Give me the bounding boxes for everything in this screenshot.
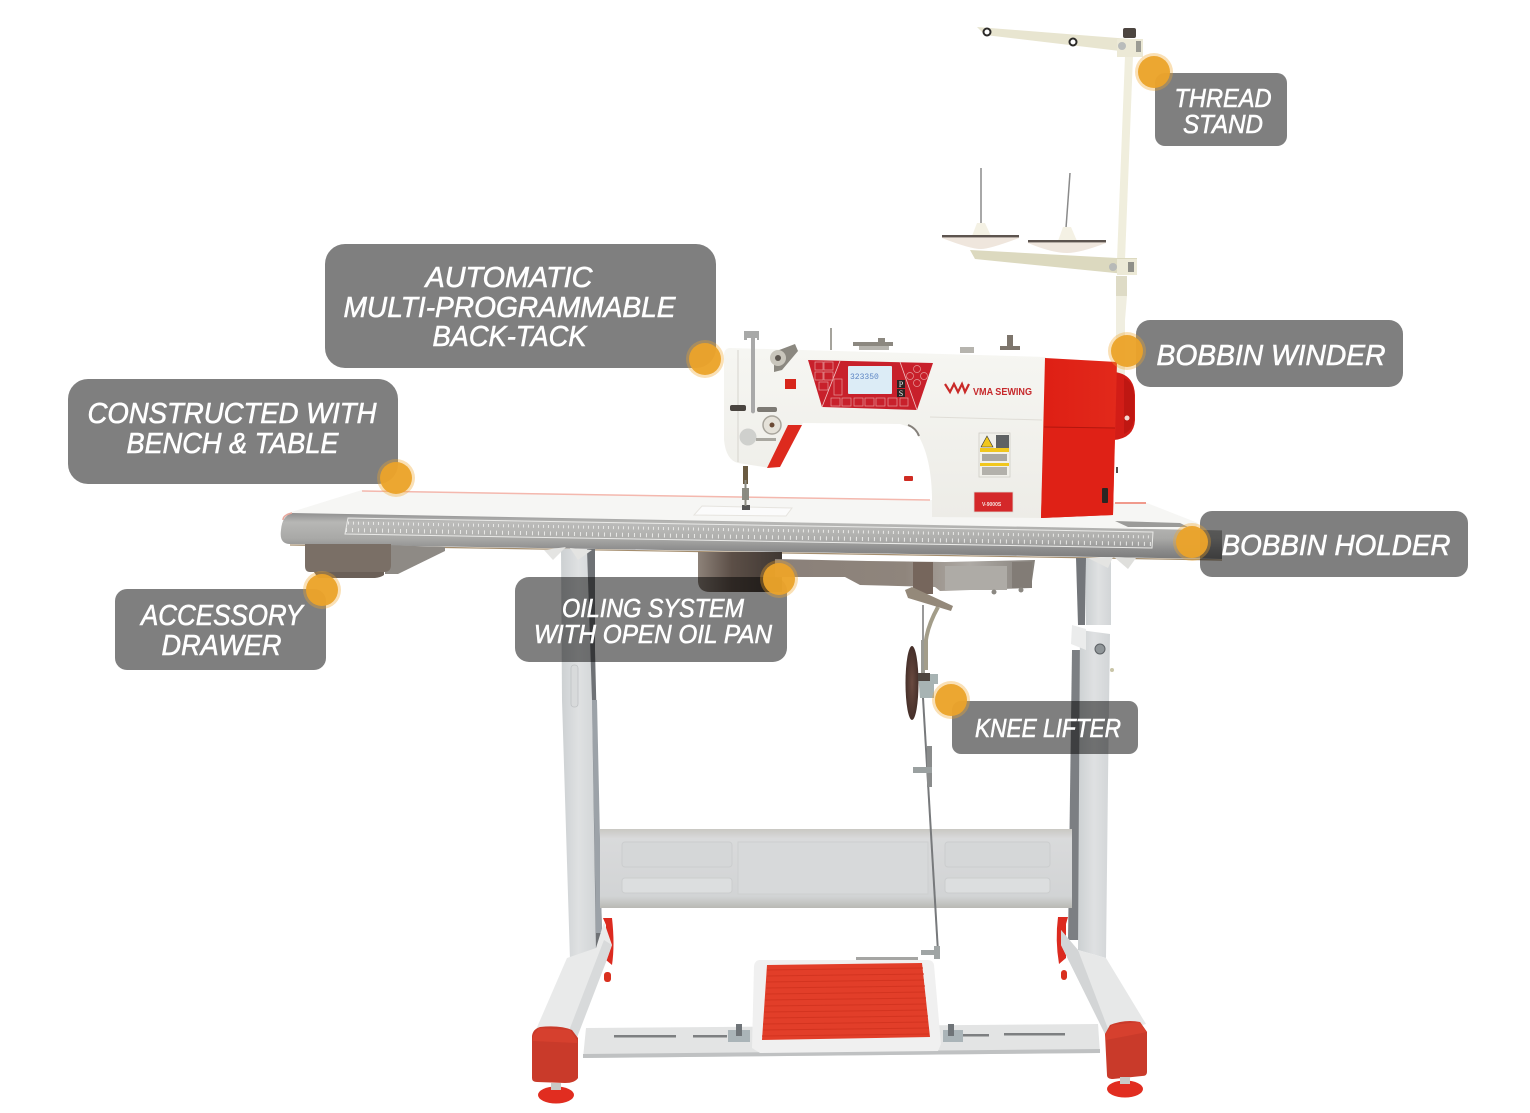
label: thread stand: THREAD: [1174, 83, 1272, 113]
knee pad: [906, 646, 918, 720]
top arm: [977, 27, 1143, 57]
label: oiling system: [515, 577, 787, 662]
machine logo: VMA SEWING: [973, 386, 1032, 398]
ruler: [345, 518, 1153, 548]
lower tube of thread stand: [1116, 276, 1127, 375]
base frame: [532, 917, 1147, 1104]
marker: oiling system: [760, 560, 798, 598]
needle bar: [751, 336, 755, 414]
left foot pad: [538, 1086, 574, 1104]
table surface: [285, 490, 1198, 532]
lever: [904, 476, 913, 481]
small red square: [785, 379, 796, 389]
label: automatic back-tack: BACK-TACK: [432, 321, 588, 353]
label: thread stand: [1155, 73, 1287, 146]
right tab: [1057, 917, 1068, 964]
label: oiling system: OILING SYSTEM: [562, 593, 744, 623]
pedal frame: [752, 960, 941, 1053]
machine head behind parts: [859, 344, 974, 353]
label: oiling system: WITH OPEN OIL PAN: [534, 619, 772, 649]
left tab: [603, 918, 614, 965]
marker: back-tack: [686, 340, 724, 378]
red motor housing: [1041, 358, 1135, 518]
label: bobbin winder: BOBBIN WINDER: [1156, 340, 1386, 372]
right foot bar: [1061, 930, 1146, 1036]
clamp: [918, 674, 938, 698]
label: accessory drawer: ACCESSORY: [139, 600, 305, 632]
machine body: [724, 348, 1046, 518]
marker: knee lifter: [932, 681, 970, 719]
needle assembly: [742, 466, 750, 510]
left foot bar: [535, 922, 612, 1040]
label: automatic back-tack: [325, 244, 716, 368]
oil pan: [698, 552, 1035, 594]
table underside line: [290, 545, 1222, 560]
left leg: [544, 547, 602, 960]
accessory drawer: [305, 544, 445, 578]
label: thread stand: STAND: [1183, 109, 1263, 139]
marker: accessory drawer: [303, 571, 341, 609]
crossbar: [600, 829, 1072, 908]
label: automatic back-tack: AUTOMATIC: [424, 262, 594, 294]
label: bench and table: CONSTRUCTED WITH: [88, 398, 377, 430]
thread spindles and discs: [942, 168, 1106, 253]
marker: bobbin winder: [1108, 332, 1146, 370]
warning label: [979, 433, 1010, 477]
upright post: [1117, 56, 1133, 260]
pedal: [728, 957, 963, 1053]
label: bobbin holder: [1200, 511, 1468, 577]
model plate: [974, 492, 1013, 512]
label: accessory drawer: [115, 589, 326, 670]
knee lifter: [905, 587, 953, 959]
control panel: 323350: [850, 373, 879, 382]
marker: bobbin holder: [1173, 523, 1211, 561]
control panel: S: [899, 389, 903, 398]
left cap: [532, 1026, 578, 1083]
head controls: [730, 405, 746, 411]
table front edge: [281, 513, 1222, 559]
label: accessory drawer: DRAWER: [162, 630, 282, 662]
right cap: [1105, 1021, 1147, 1079]
label: knee lifter: KNEE LIFTER: [975, 713, 1121, 743]
bobbin cover: [1115, 521, 1188, 527]
thread stand: [942, 27, 1143, 375]
lower arm: [970, 250, 1137, 275]
marker: thread stand: [1135, 53, 1173, 91]
pedal connector: [921, 946, 940, 959]
pedal rubber: [762, 963, 930, 1040]
label: bobbin holder: BOBBIN HOLDER: [1222, 530, 1451, 562]
P and S keys: [897, 380, 905, 388]
marker: bench and table: [377, 459, 415, 497]
right leg: [1068, 557, 1136, 958]
control panel: [808, 360, 933, 410]
needle plate: [694, 506, 792, 516]
right foot pad: [1107, 1080, 1143, 1098]
model plate: V-9000S: [982, 502, 1002, 508]
knee lifter rods: [921, 640, 925, 675]
machine logo: [945, 384, 1032, 398]
label: knee lifter: [952, 701, 1138, 754]
red front buttons: [767, 425, 802, 468]
take-up mechanism: [774, 344, 798, 372]
horizontal foot bar: [583, 1024, 1100, 1058]
label: automatic back-tack: MULTI-PROGRAMMABLE: [344, 292, 676, 324]
label: bench and table: [68, 379, 398, 484]
label: bench and table: BENCH & TABLE: [126, 428, 339, 460]
table top: [281, 490, 1222, 560]
control panel: P: [899, 380, 904, 389]
label: bobbin winder: [1136, 320, 1403, 387]
bracket: [905, 587, 953, 611]
LCD display: [848, 366, 892, 394]
rod clamp: [927, 746, 932, 787]
sewing machine: [724, 328, 1135, 518]
